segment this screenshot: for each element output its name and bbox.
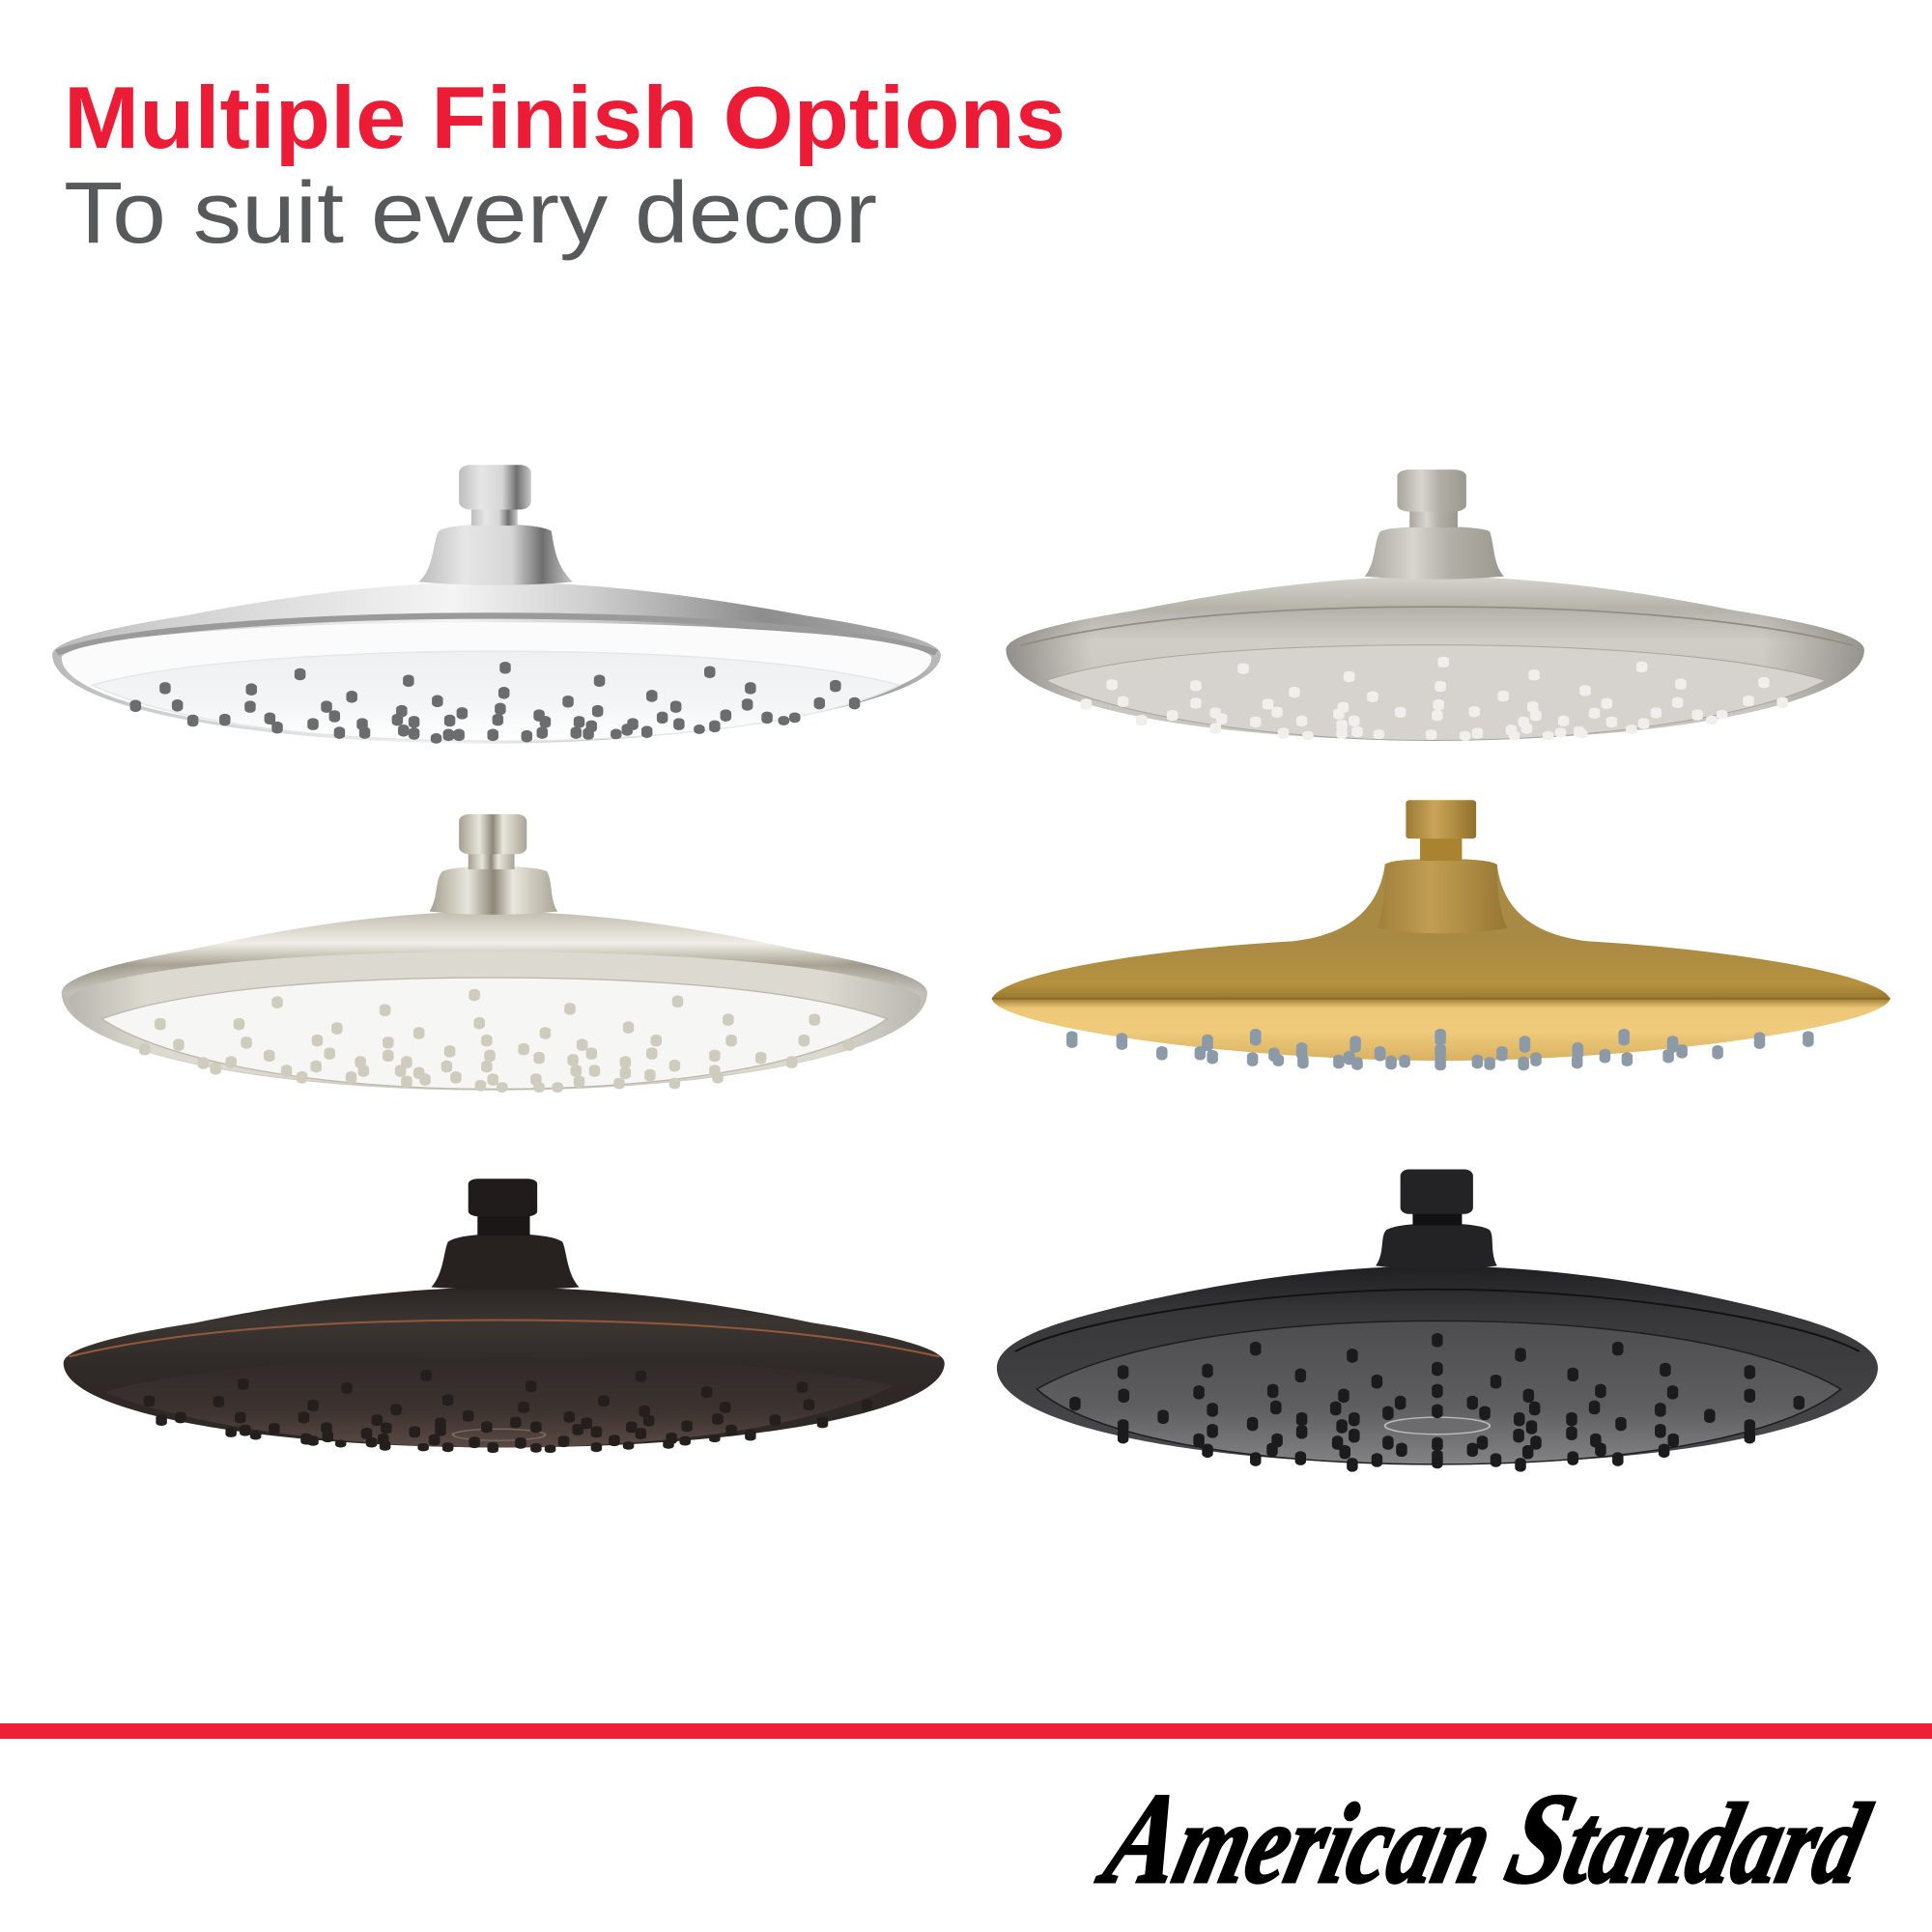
chrome rim line <box>57 615 936 653</box>
black neck <box>1376 1224 1497 1269</box>
polished nickel lower band <box>69 952 922 1089</box>
gold nozzles <box>1072 1033 1808 1066</box>
black badge <box>1385 1417 1490 1435</box>
shower head: brushed gold <box>992 800 1890 1066</box>
polished nickel nozzles <box>145 993 849 1089</box>
black face <box>1037 1321 1841 1464</box>
gold disc and neck body <box>992 859 1890 1061</box>
gold collar <box>1406 800 1476 838</box>
chrome neck <box>419 524 573 585</box>
nickel stem <box>1409 511 1458 527</box>
bronze neck <box>431 1234 580 1290</box>
polished nickel stem <box>469 852 515 869</box>
polished nickel face <box>101 978 887 1089</box>
nickel face <box>1046 645 1826 740</box>
polished nickel neck <box>430 867 557 915</box>
gold seam line <box>992 997 1890 1001</box>
bronze nozzles <box>149 1373 867 1450</box>
bronze badge <box>453 1429 545 1440</box>
black stem <box>1412 1211 1462 1225</box>
gold neck shading <box>1378 859 1507 933</box>
black collar <box>1401 1170 1473 1214</box>
chrome face <box>93 651 899 741</box>
nickel neck <box>1365 526 1504 580</box>
chrome rim band <box>62 622 931 741</box>
bronze rim line <box>69 1320 940 1356</box>
polished nickel edge shading <box>62 911 927 1091</box>
subtitle: To suit every decor: To suit every decor <box>64 165 877 262</box>
black disc body <box>997 1265 1878 1464</box>
black rim line <box>1015 1290 1860 1351</box>
bronze disc body <box>64 1287 945 1447</box>
chrome stem <box>471 507 518 526</box>
title: Multiple Finish Options: Multiple Finish Options <box>64 70 1065 167</box>
nickel collar <box>1397 469 1466 512</box>
gold stem <box>1420 837 1462 861</box>
nickel rim line <box>1020 607 1853 645</box>
bronze collar <box>469 1179 537 1216</box>
polished nickel disc body <box>62 911 927 1091</box>
shower head: oil rubbed bronze <box>64 1179 945 1450</box>
chrome disc body <box>52 582 941 744</box>
bronze face <box>104 1357 894 1447</box>
nickel disc body <box>1006 577 1864 740</box>
shower head: matte black <box>997 1170 1878 1467</box>
logo: American Standard: American Standard <box>1087 1768 1884 1911</box>
shower head: polished nickel <box>62 814 927 1091</box>
bronze stem <box>477 1215 530 1236</box>
black nozzles <box>1075 1337 1799 1467</box>
polished nickel collar <box>459 814 526 854</box>
chrome nozzles <box>135 666 855 740</box>
red divider bar <box>0 1723 1932 1739</box>
nickel nozzles <box>1086 660 1782 738</box>
chrome collar <box>459 465 531 509</box>
shower head: brushed nickel <box>1006 469 1864 740</box>
shower head: polished chrome <box>52 465 941 744</box>
nickel edge shading <box>1006 577 1864 740</box>
